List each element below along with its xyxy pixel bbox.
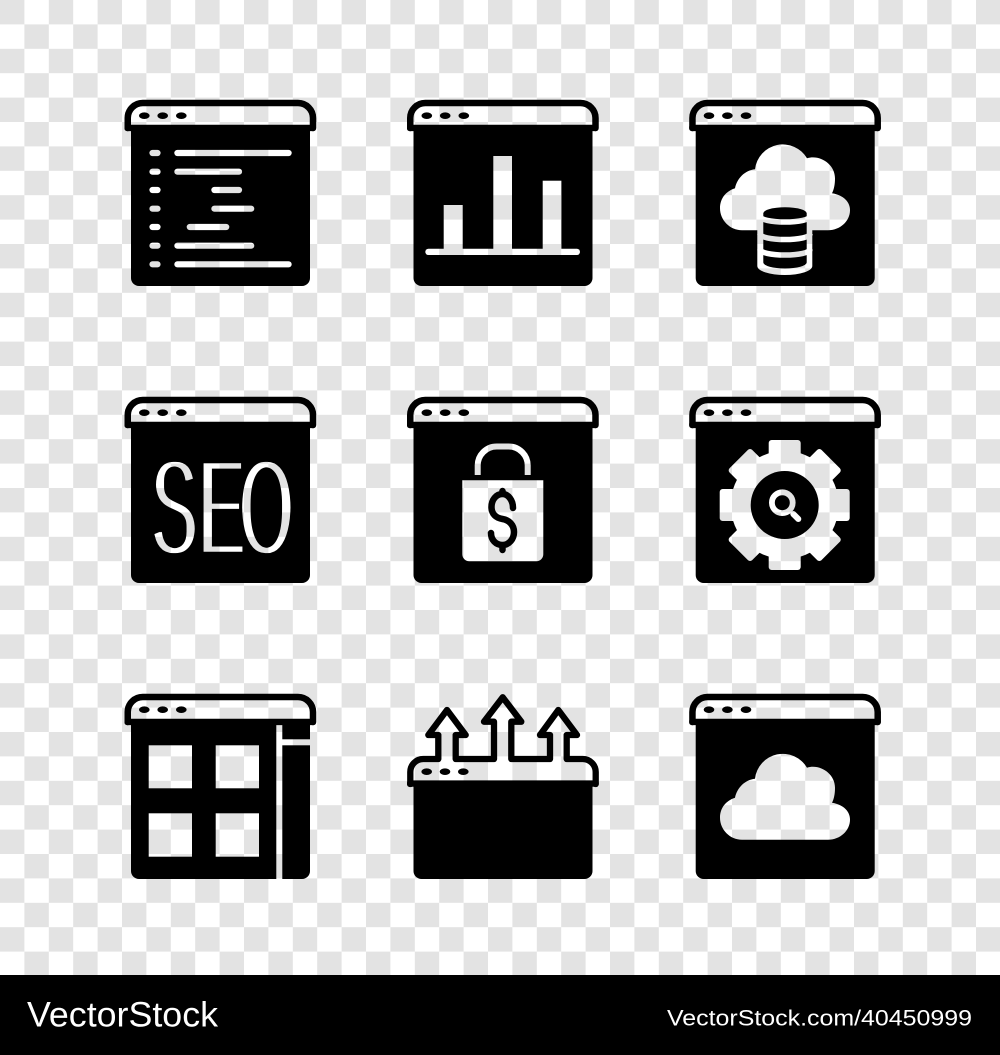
footer brand name: VectorStock — [27, 996, 219, 1035]
icon: browser with code lines — [124, 103, 316, 286]
icon: browser with shopping bag — [407, 400, 598, 583]
browser body with bars — [414, 125, 592, 286]
title bar lip — [407, 780, 599, 787]
browser title bar — [124, 103, 316, 131]
browser body with shopping bag and dollar — [414, 422, 592, 583]
icon: browser with cloud database — [689, 103, 881, 286]
browser body with cloud — [696, 719, 875, 879]
browser title bar — [689, 400, 881, 428]
icon: browser with bar chart — [407, 103, 598, 286]
icon: browser with search gear — [689, 400, 881, 583]
browser title bar — [407, 103, 598, 131]
browser body with cloud and database — [696, 125, 875, 286]
icon: browser with cloud — [689, 697, 881, 879]
icon: browser with SEO text — [124, 400, 316, 583]
browser title bar — [689, 103, 881, 131]
browser body with gear and magnifier — [696, 422, 875, 583]
browser title bar — [124, 697, 316, 725]
browser title bar — [124, 400, 316, 428]
browser title bar — [407, 400, 598, 428]
browser body with four squares and sidebar — [131, 719, 310, 879]
browser body with code lines — [131, 125, 310, 286]
icon: browser with three up arrows — [407, 697, 599, 879]
browser title bar — [689, 697, 881, 725]
browser body with SEO lettering — [131, 422, 310, 583]
window dots — [421, 768, 469, 775]
browser body — [414, 781, 592, 879]
footer image reference: VectorStock.com/40450999 — [667, 1006, 972, 1031]
arrows outline and title bar — [410, 697, 596, 784]
icon: browser with grid layout — [124, 697, 316, 879]
footer band — [0, 975, 1000, 1055]
